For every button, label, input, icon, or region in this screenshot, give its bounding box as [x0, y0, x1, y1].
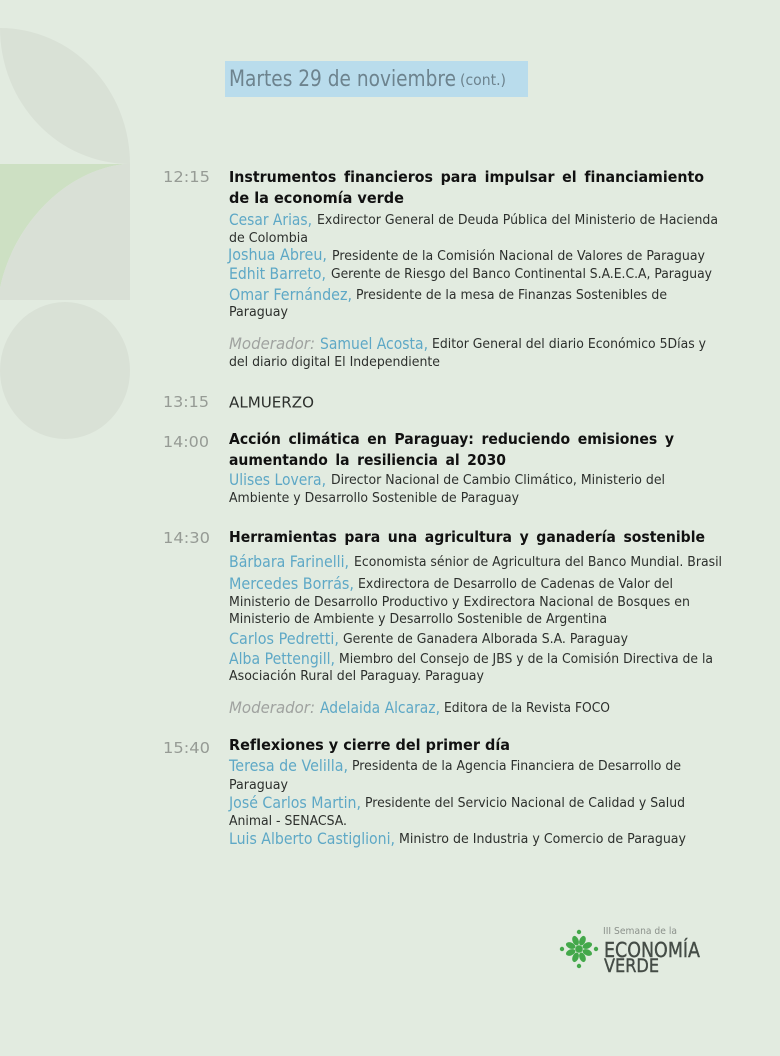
icon: green flower — [560, 930, 598, 968]
session 12:15: Omar Fernández, — [229, 285, 352, 304]
session 12:15: Instrumentos financieros para impulsar el financiamiento — [229, 168, 704, 186]
session 14:30: Moderador: — [229, 698, 315, 717]
session 14:30: Miembro del Consejo de JBS y de la Comisión Directiva de la — [339, 651, 713, 667]
session 12:15: de la economía verde — [229, 189, 404, 207]
session 15:40: Teresa de Velilla, — [228, 756, 348, 775]
logo: VERDE — [604, 955, 659, 977]
session 14:30 — [163, 528, 722, 717]
decorative shapes — [0, 28, 130, 439]
session 14:00: aumentando la resiliencia al 2030 — [229, 451, 506, 469]
session 15:40 — [163, 736, 686, 848]
date heading — [225, 61, 528, 97]
session 14:30: Ministerio de Ambiente y Desarrollo Sostenible de Argentina — [229, 611, 607, 627]
session 14:30: Carlos Pedretti, — [229, 629, 339, 648]
session 15:40: Luis Alberto Castiglioni, — [229, 829, 395, 848]
session 12:15: Cesar Arias, — [229, 210, 312, 229]
date heading: Martes 29 de noviembre — [229, 67, 456, 92]
session 12:15: Exdirector General de Deuda Pública del Ministerio de Hacienda — [317, 212, 718, 228]
session 12:15: Moderador: — [229, 334, 315, 353]
session 12:15 — [163, 168, 718, 370]
session 12:15: de Colombia — [229, 230, 308, 246]
session 12:15: Samuel Acosta, — [320, 334, 428, 353]
session 14:00: Ambiente y Desarrollo Sostenible de Paraguay — [229, 490, 519, 506]
session 15:40: José Carlos Martin, — [228, 793, 361, 812]
session 14:30: Gerente de Ganadera Alborada S.A. Paraguay — [343, 631, 628, 647]
session 15:40: Ministro de Industria y Comercio de Paraguay — [399, 831, 686, 847]
session 13:15 lunch: ALMUERZO — [229, 394, 314, 412]
session 15:40: Animal - SENACSA. — [229, 813, 347, 829]
session 15:40: Paraguay — [229, 777, 288, 793]
session 12:15: Presidente de la mesa de Finanzas Sostenibles de — [356, 287, 667, 303]
session 14:30: Economista sénior de Agricultura del Banco Mundial. Brasil — [354, 554, 722, 570]
session 14:30: 14:30 — [163, 529, 210, 547]
session 12:15: Paraguay — [229, 304, 288, 320]
session 14:30: Alba Pettengill, — [229, 649, 335, 668]
session 12:15: Edhit Barreto, — [229, 264, 326, 283]
session 15:40: Presidenta de la Agencia Financiera de Desarrollo de — [352, 758, 681, 774]
session 14:30: Editora de la Revista FOCO — [444, 700, 610, 716]
session 12:15: Editor General del diario Económico 5Días y — [432, 336, 706, 352]
session 15:40: Reflexiones y cierre del primer día — [229, 736, 510, 754]
session 13:15 lunch — [163, 393, 314, 412]
session 12:15: del diario digital El Independiente — [229, 354, 440, 370]
session 14:30: Exdirectora de Desarrollo de Cadenas de Valor del — [358, 576, 673, 592]
logo — [560, 926, 700, 977]
logo: III Semana de la — [603, 926, 677, 937]
session 12:15: Presidente de la Comisión Nacional de Valores de Paraguay — [332, 248, 705, 264]
session 14:30: Adelaida Alcaraz, — [320, 698, 440, 717]
session 14:00: 14:00 — [163, 433, 209, 451]
session 14:00 — [163, 430, 674, 506]
session 14:30: Herramientas para una agricultura y ganadería sostenible — [229, 528, 705, 546]
session 12:15: Gerente de Riesgo del Banco Continental S.A.E.C.A, Paraguay — [331, 266, 712, 282]
session 14:30: Bárbara Farinelli, — [229, 552, 349, 571]
session 14:30: Ministerio de Desarrollo Productivo y Exdirectora Nacional de Bosques en — [229, 594, 690, 610]
session 15:40: 15:40 — [163, 739, 210, 757]
session 14:00: Director Nacional de Cambio Climático, Ministerio del — [331, 472, 665, 488]
session 13:15 lunch: 13:15 — [163, 393, 209, 411]
session 15:40: Presidente del Servicio Nacional de Calidad y Salud — [365, 795, 685, 811]
session 14:00: Acción climática en Paraguay: reduciendo emisiones y — [229, 430, 674, 448]
date heading: (cont.) — [460, 71, 506, 89]
session 14:30: Asociación Rural del Paraguay. Paraguay — [229, 668, 484, 684]
session 12:15: 12:15 — [163, 168, 210, 186]
logo: ECONOMÍA — [604, 938, 700, 962]
session 14:30: Mercedes Borrás, — [229, 574, 354, 593]
session 14:00: Ulises Lovera, — [229, 470, 326, 489]
session 12:15: Joshua Abreu, — [227, 245, 327, 264]
